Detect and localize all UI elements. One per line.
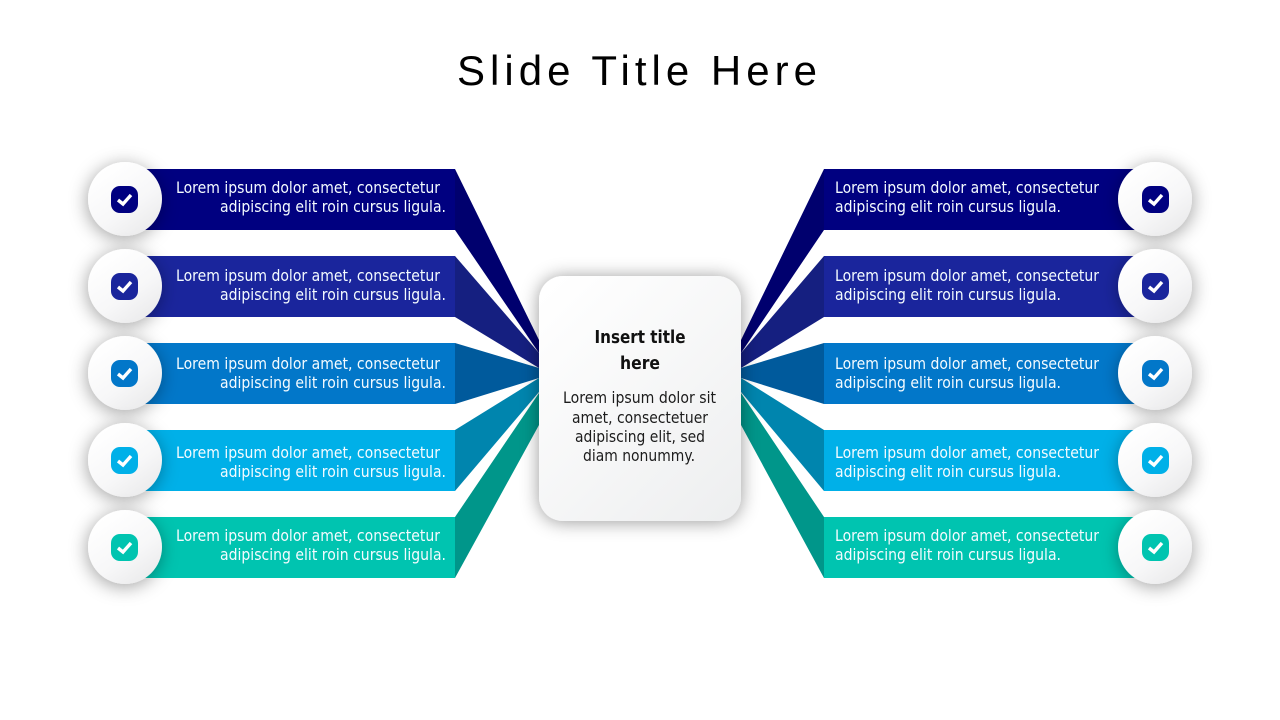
ribbon text (176, 443, 446, 481)
title: Slide Title Here (457, 47, 817, 94)
ribbon (824, 256, 1140, 317)
ribbon text: Lorem ipsum dolor amet, consectetur (176, 178, 440, 197)
ribbon text: adipiscing elit roin cursus ligula. (220, 285, 446, 304)
left item 3 (88, 336, 539, 410)
ribbon (824, 169, 1140, 230)
card body text: diam nonummy. (583, 446, 695, 465)
check disc (88, 423, 162, 497)
right item 1 (741, 162, 1192, 353)
ribbon (140, 430, 455, 491)
connector wedge (741, 256, 824, 368)
connector wedge (455, 378, 539, 491)
connector wedge (455, 256, 539, 368)
ribbon text (835, 266, 1099, 304)
check disc (88, 249, 162, 323)
check disc (88, 336, 162, 410)
ribbon text: adipiscing elit roin cursus ligula. (220, 545, 446, 564)
center card (539, 276, 741, 521)
ribbon (140, 517, 455, 578)
connector wedge (741, 393, 824, 578)
connector wedge (741, 378, 824, 491)
ribbon text: Lorem ipsum dolor amet, consectetur (176, 526, 440, 545)
check disc (1118, 423, 1192, 497)
card heading: Insert title (594, 328, 686, 348)
ribbon text (176, 178, 446, 216)
ribbon text: adipiscing elit roin cursus ligula. (835, 285, 1061, 304)
card heading: here (620, 354, 660, 374)
ribbon (140, 343, 455, 404)
ribbon text: adipiscing elit roin cursus ligula. (835, 197, 1061, 216)
connector wedge (455, 169, 539, 353)
check disc (88, 162, 162, 236)
ribbon (140, 256, 455, 317)
ribbon text: Lorem ipsum dolor amet, consectetur (835, 266, 1099, 285)
ribbon text (176, 354, 446, 392)
card heading (594, 328, 686, 374)
ribbon (824, 517, 1140, 578)
right item 3 (741, 336, 1192, 410)
ribbon text: Lorem ipsum dolor amet, consectetur (176, 266, 440, 285)
ribbon text (176, 526, 446, 564)
connector wedge (741, 343, 824, 404)
ribbon text (835, 178, 1099, 216)
ribbon text: adipiscing elit roin cursus ligula. (835, 545, 1061, 564)
ribbon text: Lorem ipsum dolor amet, consectetur (835, 354, 1099, 373)
ribbon text: Lorem ipsum dolor amet, consectetur (835, 178, 1099, 197)
check disc (1118, 510, 1192, 584)
ribbon text: Lorem ipsum dolor amet, consectetur (835, 443, 1099, 462)
card body text: adipiscing elit, sed (575, 427, 705, 446)
ribbon text: Lorem ipsum dolor amet, consectetur (835, 526, 1099, 545)
ribbon (824, 430, 1140, 491)
ribbon text: adipiscing elit roin cursus ligula. (835, 373, 1061, 392)
ribbon text: adipiscing elit roin cursus ligula. (220, 373, 446, 392)
ribbon text: adipiscing elit roin cursus ligula. (220, 462, 446, 481)
left item 4 (88, 378, 539, 497)
card body text (563, 388, 716, 465)
ribbon text: Lorem ipsum dolor amet, consectetur (176, 443, 440, 462)
ribbon text: adipiscing elit roin cursus ligula. (835, 462, 1061, 481)
ribbon text (835, 354, 1099, 392)
ribbon (140, 169, 455, 230)
connector wedge (455, 393, 539, 578)
ribbon text: Lorem ipsum dolor amet, consectetur (176, 354, 440, 373)
right item 4 (741, 378, 1192, 497)
check disc (1118, 336, 1192, 410)
ribbon text (835, 526, 1099, 564)
connector wedge (741, 169, 824, 353)
card body (539, 276, 741, 521)
left item 1 (88, 162, 539, 353)
check disc (1118, 162, 1192, 236)
ribbon (824, 343, 1140, 404)
ribbon text (176, 266, 446, 304)
check disc (88, 510, 162, 584)
card body text: amet, consectetuer (572, 408, 708, 427)
right item 2 (741, 249, 1192, 368)
left item 5 (88, 393, 539, 584)
right item 5 (741, 393, 1192, 584)
left item 2 (88, 249, 539, 368)
ribbon text (835, 443, 1099, 481)
check disc (1118, 249, 1192, 323)
ribbon text: adipiscing elit roin cursus ligula. (220, 197, 446, 216)
connector wedge (455, 343, 539, 404)
card body text: Lorem ipsum dolor sit (563, 388, 716, 407)
